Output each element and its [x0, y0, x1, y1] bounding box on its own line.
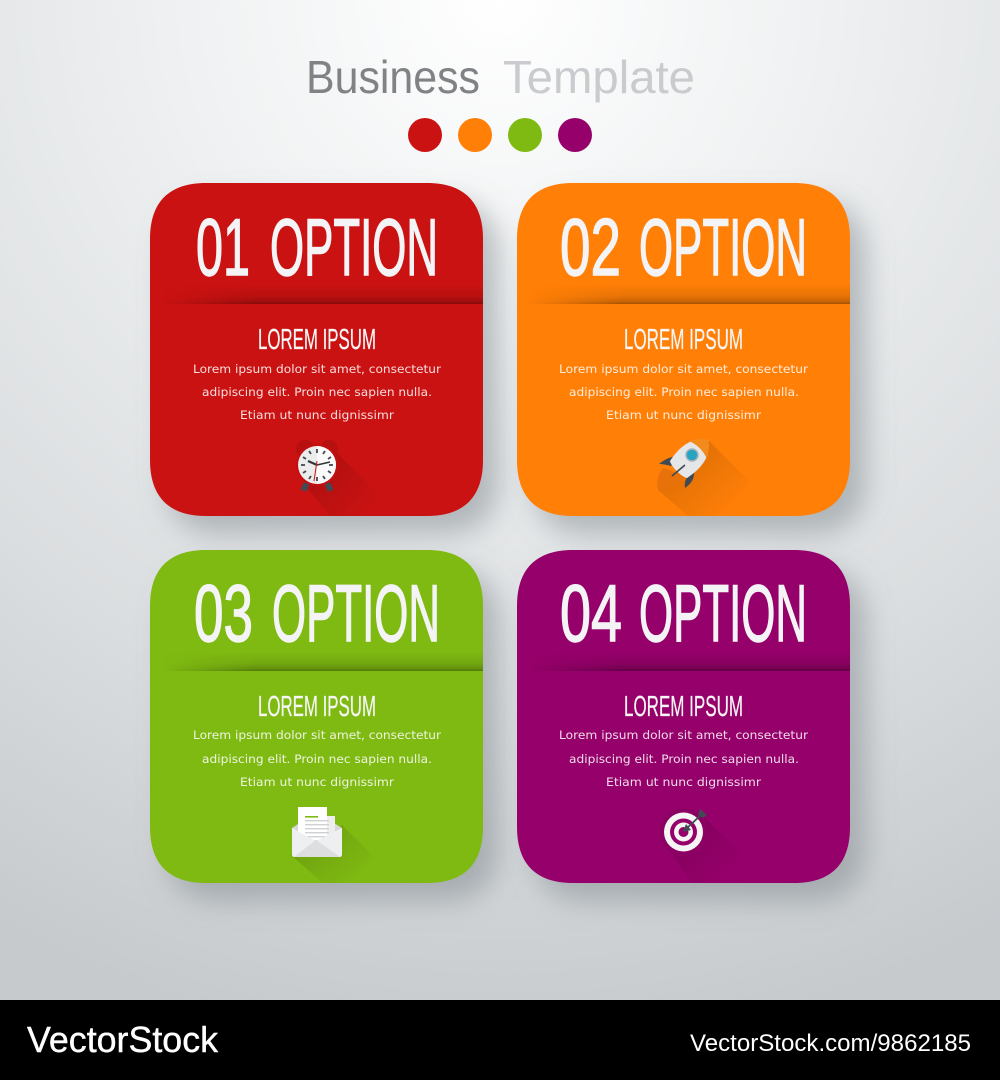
body text: adipiscing elit. Proin nec sapien nulla. [202, 385, 432, 399]
body text: Lorem ipsum dolor sit amet, consectetur [559, 728, 808, 742]
heading: 03 option: 03 [194, 569, 253, 659]
heading: 02 option: OPTION [639, 203, 807, 293]
colour dots [408, 118, 592, 152]
heading: 01 option [196, 203, 438, 293]
title [306, 51, 695, 103]
subheading: LOREM IPSUM [258, 691, 376, 723]
subheading: LOREM IPSUM [624, 691, 743, 723]
subheading: LOREM IPSUM [258, 324, 376, 356]
footer bar [0, 1000, 1000, 1080]
subheading: LOREM IPSUM [624, 324, 743, 356]
heading: 04 option: OPTION [639, 569, 807, 659]
body text: Lorem ipsum dolor sit amet, consectetur [193, 728, 441, 742]
icon: rocket [657, 439, 742, 516]
panel: 03 option [150, 550, 499, 901]
heading: 04 option [560, 569, 807, 659]
icon: envelope [292, 807, 363, 882]
body text [193, 362, 441, 422]
heading: 02 option [560, 203, 807, 293]
panel: 01 option [150, 183, 499, 535]
icon: target [660, 808, 724, 876]
heading: 03 option: OPTION [272, 569, 440, 659]
footer image id: VectorStock.com/9862185 [690, 1030, 971, 1057]
heading: 01 option: 01 [196, 203, 250, 293]
body text: Etiam ut nunc dignissimr [240, 775, 394, 789]
panel: 02 option [517, 183, 866, 534]
body text: adipiscing elit. Proin nec sapien nulla. [569, 752, 799, 766]
body text: adipiscing elit. Proin nec sapien nulla. [569, 385, 799, 399]
body text [193, 728, 441, 789]
icon: alarm clock [296, 440, 366, 516]
body text: Etiam ut nunc dignissimr [240, 408, 394, 422]
body text: Lorem ipsum dolor sit amet, consectetur [559, 362, 808, 376]
body text [559, 728, 808, 789]
body text: Lorem ipsum dolor sit amet, consectetur [193, 362, 441, 376]
heading: 02 option: 02 [560, 203, 621, 293]
body text: Etiam ut nunc dignissimr [606, 408, 761, 422]
body text: Etiam ut nunc dignissimr [606, 775, 761, 789]
heading: 03 option [194, 569, 440, 659]
title: Template [503, 51, 695, 103]
body text: adipiscing elit. Proin nec sapien nulla. [202, 752, 432, 766]
body text [559, 362, 808, 422]
title: Business [306, 51, 480, 103]
panel: 04 option [517, 550, 866, 901]
heading: 04 option: 04 [560, 569, 622, 659]
heading: 01 option: OPTION [270, 203, 438, 293]
footer brand: VectorStock [27, 1019, 219, 1060]
